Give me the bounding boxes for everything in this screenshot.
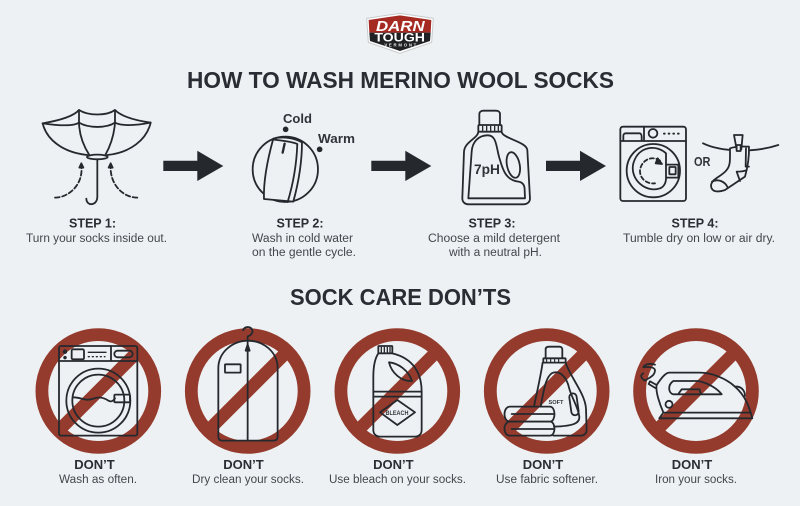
step 2 heading: STEP 2: xyxy=(276,216,324,230)
icon: sock on clothesline xyxy=(703,135,778,191)
step 3 heading: STEP 3: xyxy=(468,216,516,230)
step 4 text: Tumble dry on low or air dry. xyxy=(623,233,775,245)
arrow 2 xyxy=(371,151,431,181)
don't 4 text: Use fabric softener. xyxy=(496,474,598,486)
icon: inverted umbrella xyxy=(43,110,151,204)
step 4 panel xyxy=(620,127,778,245)
label: 7pH: 7pH xyxy=(474,161,500,177)
step 2 text: on the gentle cycle. xyxy=(252,247,356,259)
don't 1 text: Wash as often. xyxy=(59,474,137,486)
prohibition sign 4 xyxy=(490,335,603,447)
don't 4 heading: DON’T xyxy=(523,457,563,472)
icon: washing machine xyxy=(59,346,137,436)
logo: Darn Tough Vermont: DARN xyxy=(376,19,425,35)
arrow 3 xyxy=(546,151,606,181)
don't 2 panel xyxy=(191,327,304,486)
logo: Darn Tough Vermont: TOUGH xyxy=(374,31,425,45)
step 3 text: with a neutral pH. xyxy=(448,247,542,259)
label: BLEACH: BLEACH xyxy=(386,410,409,417)
don't 2 text: Dry clean your socks. xyxy=(192,474,304,486)
don't 3 panel xyxy=(329,335,466,486)
step 1 heading: STEP 1: xyxy=(69,216,116,230)
title: HOW TO WASH MERINO WOOL SOCKS xyxy=(187,67,614,93)
label: OR: OR xyxy=(694,155,710,169)
don't 5 panel xyxy=(640,335,752,486)
step 4 heading: STEP 4: xyxy=(671,216,719,230)
don't 2 heading: DON’T xyxy=(223,457,264,472)
label: Cold: Cold xyxy=(283,111,312,126)
icon: temperature dial xyxy=(253,126,322,202)
logo: Darn Tough Vermont: VERMONT xyxy=(384,43,417,48)
icon: detergent bottle xyxy=(462,111,530,204)
don't 3 heading: DON’T xyxy=(373,457,414,472)
step 3 panel xyxy=(428,111,561,259)
logo: Darn Tough Vermont xyxy=(367,13,433,53)
prohibition sign 3 xyxy=(341,335,454,447)
section heading: sock care don'ts: SOCK CARE DON’TS xyxy=(290,284,511,310)
step 1 panel xyxy=(26,110,167,245)
step 3 text: Choose a mild detergent xyxy=(428,233,561,245)
don't 1 heading: DON’T xyxy=(74,457,115,472)
icon: garment bag xyxy=(218,327,278,441)
prohibition sign 1 xyxy=(42,335,155,447)
step 2 panel xyxy=(252,111,356,259)
icon: clothes iron xyxy=(641,364,752,418)
prohibition sign 2 xyxy=(191,335,304,447)
icon: bleach bottle xyxy=(373,346,422,437)
icon: tumble dryer xyxy=(620,127,686,201)
step 1 text: Turn your socks inside out. xyxy=(26,233,167,245)
arrow 1 xyxy=(163,151,223,181)
don't 4 panel xyxy=(490,335,603,486)
step 2 text xyxy=(252,233,356,259)
step 2 text: Wash in cold water xyxy=(252,233,353,245)
don't 5 text: Iron your socks. xyxy=(655,474,737,486)
don't 5 heading: DON’T xyxy=(672,457,712,472)
don't 3 text: Use bleach on your socks. xyxy=(329,474,466,486)
don't 1 panel xyxy=(42,335,155,486)
prohibition sign 5 xyxy=(640,335,752,447)
icon: fabric softener and towels xyxy=(504,347,587,436)
step 3 text xyxy=(428,233,561,259)
label: Warm: Warm xyxy=(318,131,355,146)
label: SOFT: SOFT xyxy=(548,400,564,406)
